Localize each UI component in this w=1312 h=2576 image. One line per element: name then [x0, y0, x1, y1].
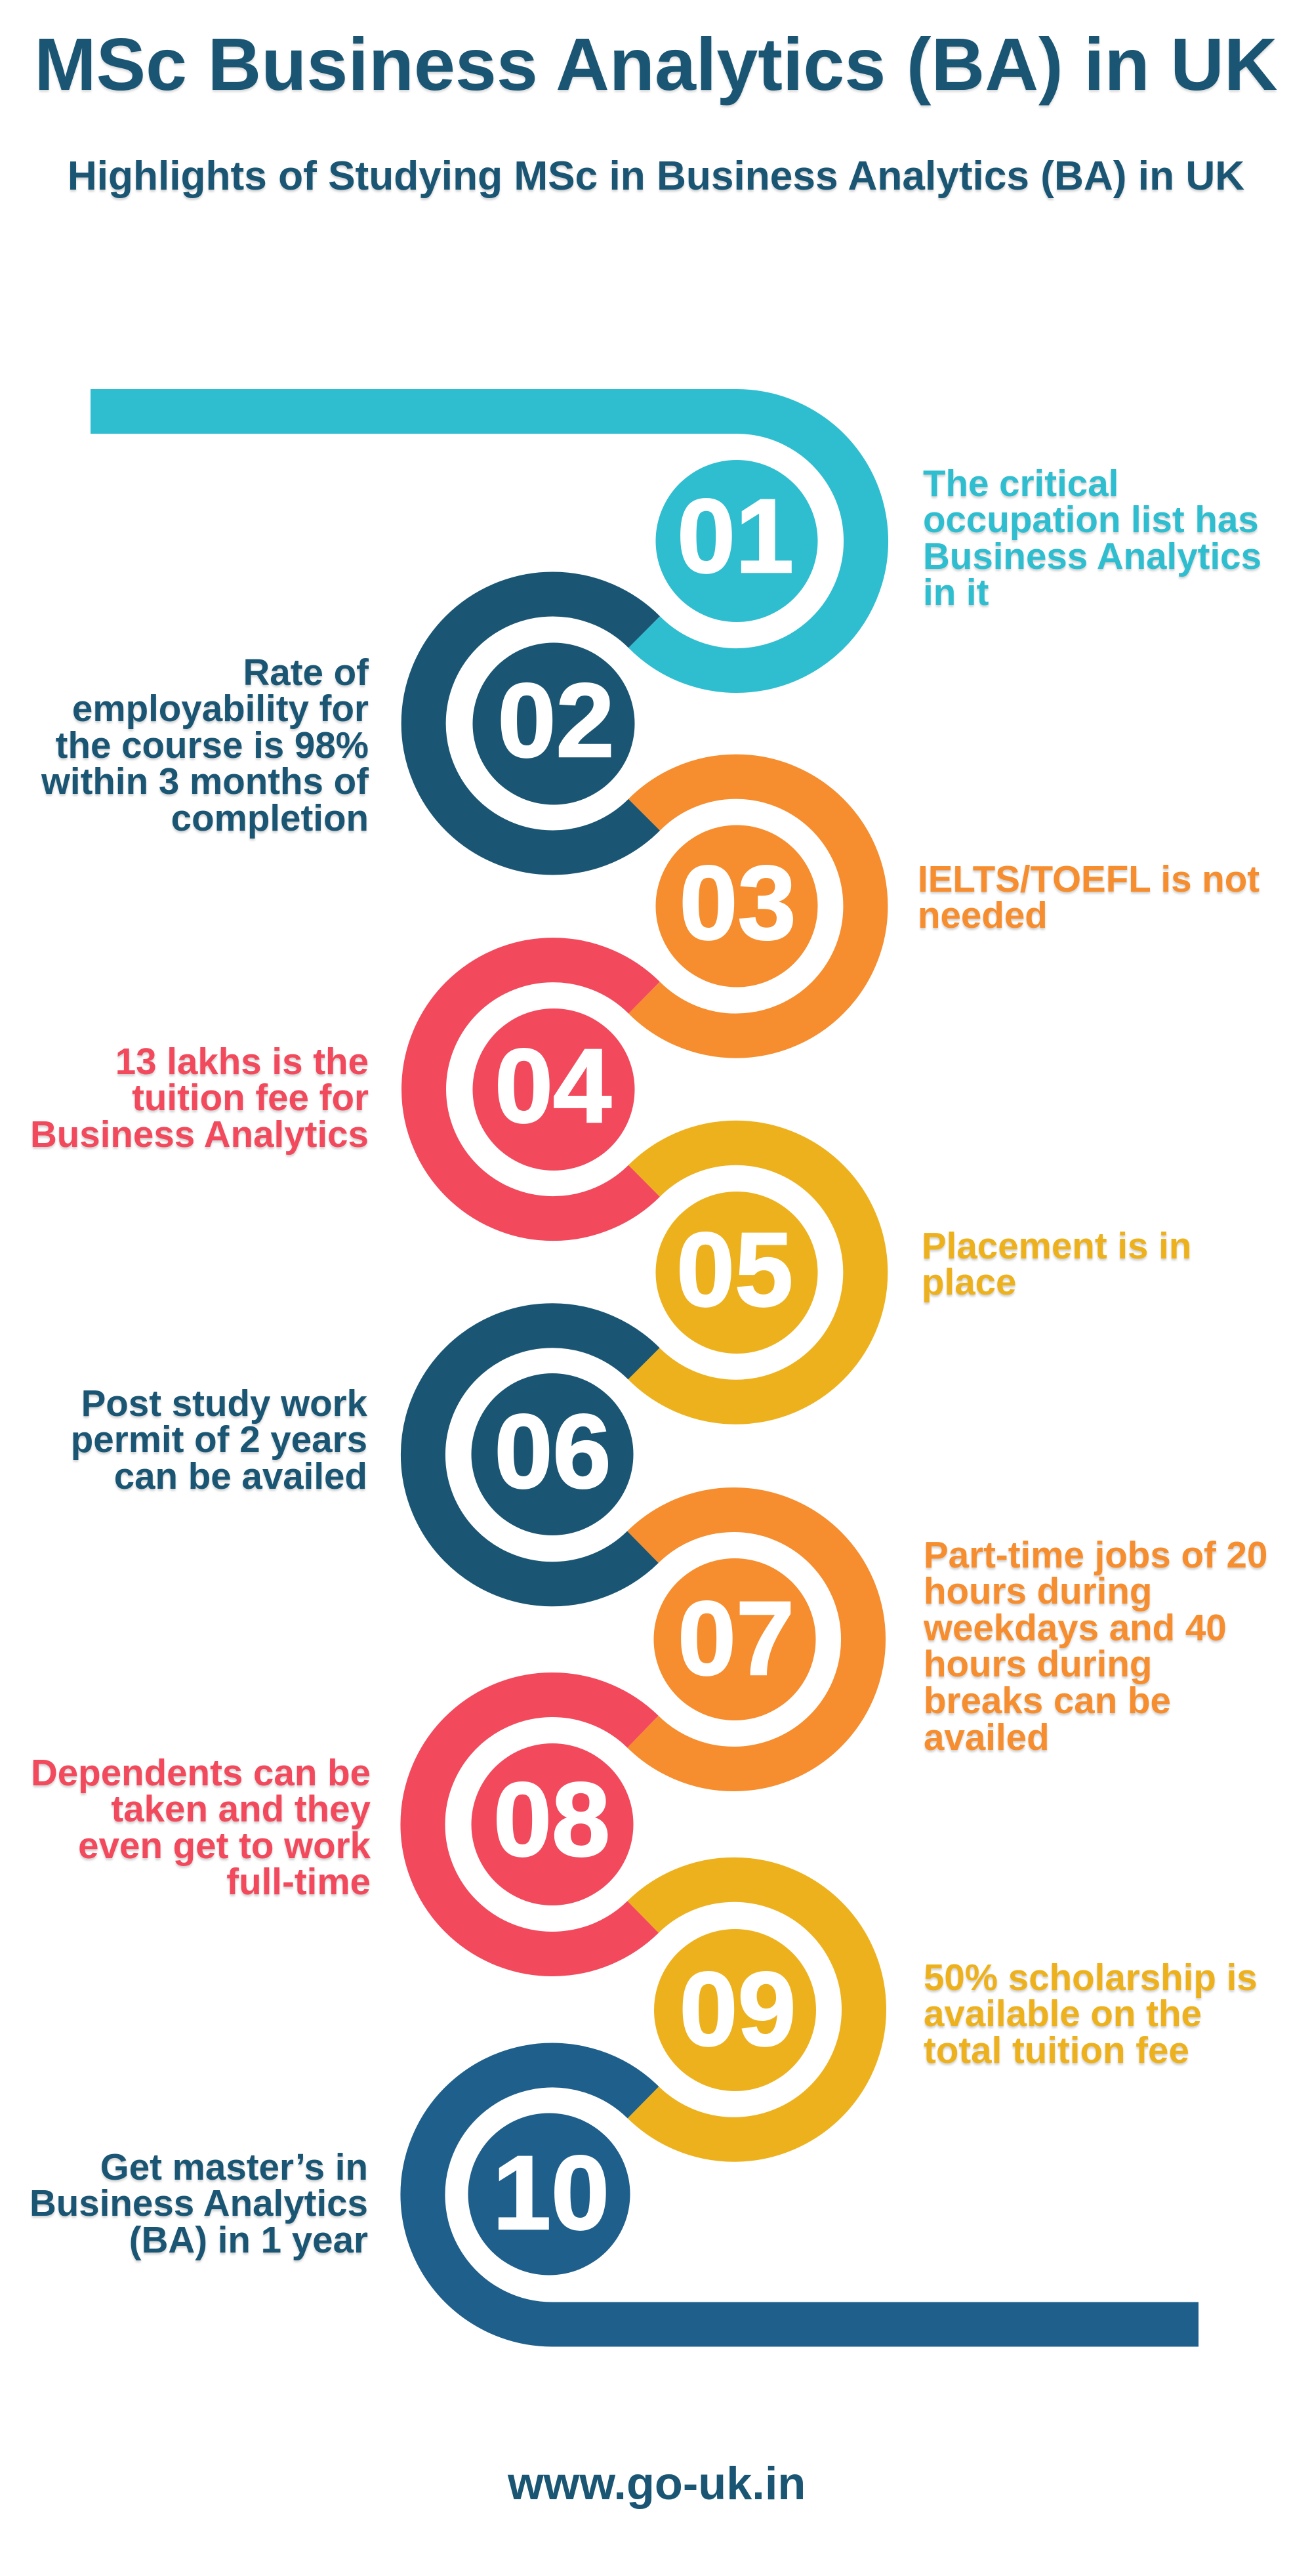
text 07: hours during — [924, 1643, 1152, 1684]
text 02: the course is 98% — [56, 724, 369, 766]
text 04: 13 lakhs is the — [115, 1041, 369, 1082]
subtitle: Highlights of Studying MSc in Business Analytics (BA) in UK — [68, 154, 1244, 199]
step 07 ring and number — [643, 1510, 863, 1769]
text 07: Part-time jobs of 20 — [924, 1534, 1267, 1575]
text 06: Post study work — [81, 1382, 367, 1424]
text 07: availed — [924, 1716, 1050, 1758]
text 06: permit of 2 years — [71, 1419, 367, 1460]
step 05 ring and number — [644, 1143, 865, 1402]
step 10 ring, tail bar and number: 10 — [493, 2134, 609, 2251]
text 01: occupation list has — [923, 499, 1259, 540]
step 02 ring and number — [424, 594, 644, 852]
text 03: needed — [918, 894, 1048, 936]
step 09 ring and number: 09 — [680, 1950, 796, 2067]
step 02 ring and number: 02 — [498, 661, 614, 779]
text 05: place — [922, 1261, 1016, 1302]
step 05 ring and number: 05 — [676, 1211, 793, 1328]
text 10: (BA) in 1 year — [129, 2219, 368, 2260]
title: MSc Business Analytics (BA) in UK — [34, 23, 1278, 106]
step 06 ring and number — [423, 1325, 644, 1584]
text 09 — [924, 1957, 1258, 2071]
website footer: www.go-uk.in — [508, 2457, 806, 2509]
text 02: completion — [171, 797, 369, 839]
text 06 — [71, 1382, 367, 1497]
text 08: taken and they — [111, 1788, 371, 1829]
text 05 — [922, 1225, 1191, 1306]
text 08: even get to work — [78, 1825, 371, 1866]
text 03: IELTS/TOEFL is not — [918, 858, 1260, 900]
text 02: Rate of — [243, 652, 369, 693]
step 04 ring and number — [424, 960, 644, 1218]
step 10 ring, tail bar and number — [422, 2066, 1199, 2324]
text 07: breaks can be — [924, 1680, 1171, 1721]
text 01 — [922, 463, 1261, 613]
step 03 ring and number — [644, 777, 865, 1036]
text 04: tuition fee for — [132, 1077, 369, 1118]
text 01: Business Analytics — [923, 535, 1261, 577]
text 09: available on the — [924, 1993, 1202, 2034]
text 02: employability for — [72, 688, 369, 729]
text 08: full-time — [226, 1861, 371, 1902]
text 05: Placement is in — [922, 1225, 1191, 1266]
text 02 — [41, 652, 370, 841]
text 10: Business Analytics — [30, 2182, 368, 2224]
text 06: can be availed — [114, 1455, 367, 1497]
text 10 — [30, 2146, 369, 2264]
text 03 — [918, 858, 1260, 936]
text 04 — [30, 1041, 369, 1157]
step 03 ring and number: 03 — [680, 844, 796, 961]
text 01: in it — [923, 571, 989, 613]
step 08 ring and number: 08 — [493, 1760, 610, 1878]
text 07: hours during — [924, 1570, 1152, 1611]
text 07 — [923, 1534, 1267, 1758]
step 01 ring and number — [91, 411, 866, 671]
text 01: The critical — [923, 463, 1118, 504]
step 06 ring and number: 06 — [495, 1392, 611, 1510]
text 10: Get master’s in — [100, 2146, 368, 2188]
step 01 ring and number: 01 — [677, 477, 794, 594]
text 02: within 3 months of — [41, 760, 369, 802]
text 07: weekdays and 40 — [924, 1607, 1227, 1648]
text 09: total tuition fee — [924, 2029, 1189, 2071]
step 09 ring and number — [643, 1880, 864, 2140]
text 08: Dependents can be — [31, 1752, 371, 1793]
step 08 ring and number — [422, 1695, 643, 1954]
step 07 ring and number: 07 — [678, 1579, 794, 1697]
text 04: Business Analytics — [30, 1113, 369, 1155]
text 08 — [31, 1752, 371, 1902]
text 09: 50% scholarship is — [924, 1957, 1258, 1998]
step 04 ring and number: 04 — [495, 1027, 611, 1144]
